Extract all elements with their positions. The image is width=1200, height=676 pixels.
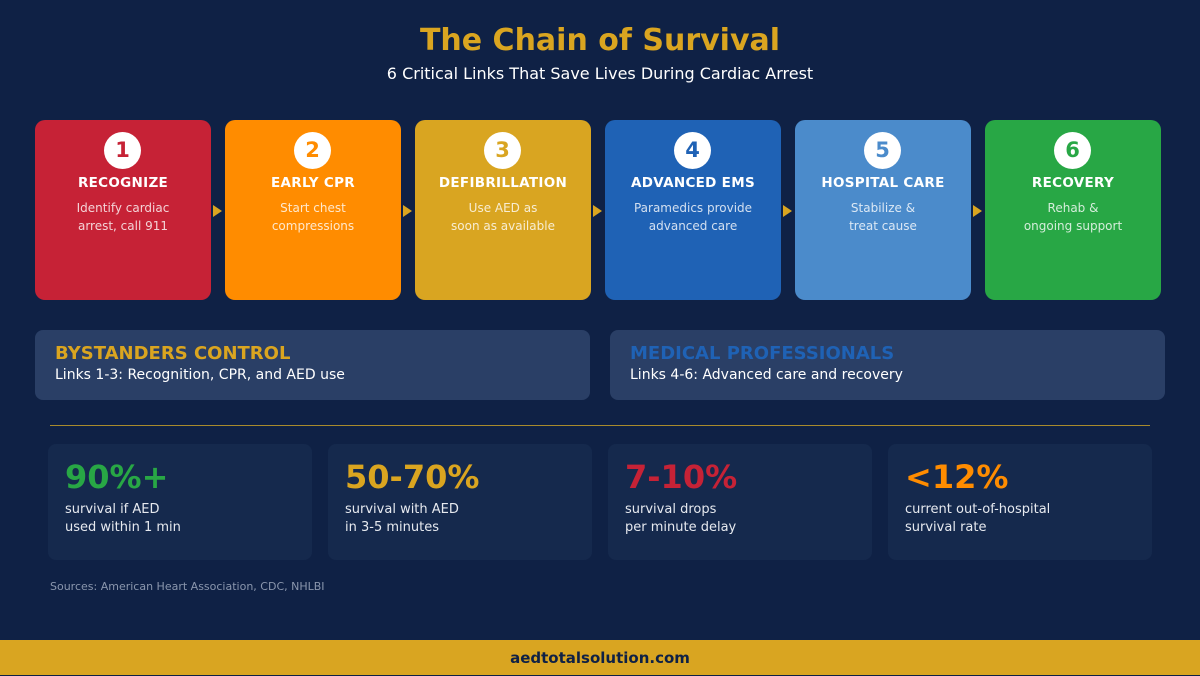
card 2: early cpr bbox=[225, 120, 401, 300]
arrow 4 bbox=[783, 205, 792, 217]
arrow 5 bbox=[973, 205, 982, 217]
stat 3: 7-10% bbox=[625, 458, 737, 496]
card 2: early cpr: EARLY CPR bbox=[271, 175, 355, 191]
stat 4 bbox=[888, 444, 1152, 560]
subtitle: 6 Critical Links That Save Lives During Cardiac Arrest bbox=[387, 64, 813, 83]
panel: medical professionals: Links 4-6: Advanced care and recovery bbox=[630, 367, 903, 383]
panel: medical professionals bbox=[610, 330, 1165, 400]
footer: aedtotalsolution.com bbox=[510, 649, 690, 667]
card 6: recovery: RECOVERY bbox=[1032, 175, 1114, 191]
arrow 1 bbox=[213, 205, 222, 217]
stat 4: survival rate bbox=[905, 520, 986, 535]
card 4: advanced ems: advanced care bbox=[649, 219, 737, 233]
card 4: advanced ems: 4 bbox=[685, 138, 700, 162]
sources: Sources: American Heart Association, CDC, NHLBI bbox=[50, 580, 325, 593]
card 6: recovery: 6 bbox=[1065, 138, 1080, 162]
stat 2 bbox=[328, 444, 592, 560]
card 2: early cpr: Start chest bbox=[280, 201, 346, 215]
stat 4: <12% bbox=[905, 458, 1008, 496]
stat 3: survival drops bbox=[625, 502, 716, 517]
stat 2: 50-70% bbox=[345, 458, 479, 496]
card 3: defibrillation: DEFIBRILLATION bbox=[439, 175, 567, 191]
panel: medical professionals: MEDICAL PROFESSIONALS bbox=[630, 343, 894, 364]
stat 3: per minute delay bbox=[625, 520, 736, 535]
card 6: recovery bbox=[985, 120, 1161, 300]
panel: bystanders: BYSTANDERS CONTROL bbox=[55, 343, 290, 364]
stat 2: in 3-5 minutes bbox=[345, 520, 439, 535]
card 5: hospital care: 5 bbox=[875, 138, 890, 162]
card 5: hospital care: HOSPITAL CARE bbox=[821, 175, 945, 191]
stat 1 bbox=[48, 444, 312, 560]
card 4: advanced ems: ADVANCED EMS bbox=[631, 175, 755, 191]
stat 4: current out-of-hospital bbox=[905, 502, 1050, 517]
card 3: defibrillation: soon as available bbox=[451, 219, 555, 233]
arrow 2 bbox=[403, 205, 412, 217]
stat 1: used within 1 min bbox=[65, 520, 181, 535]
card 3: defibrillation: Use AED as bbox=[469, 201, 537, 215]
card 4: advanced ems: Paramedics provide bbox=[634, 201, 752, 215]
card 5: hospital care: treat cause bbox=[849, 219, 917, 233]
card 1: recognize bbox=[35, 120, 211, 300]
panel: bystanders: Links 1-3: Recognition, CPR, and AED use bbox=[55, 367, 345, 383]
stat 1: survival if AED bbox=[65, 502, 160, 517]
arrow 3 bbox=[593, 205, 602, 217]
stat 1: 90%+ bbox=[65, 458, 168, 496]
footer bbox=[0, 640, 1200, 675]
card 6: recovery: Rehab & bbox=[1048, 201, 1098, 215]
card 5: hospital care bbox=[795, 120, 971, 300]
card 4: advanced ems bbox=[605, 120, 781, 300]
card 3: defibrillation bbox=[415, 120, 591, 300]
panel: bystanders bbox=[35, 330, 590, 400]
card 1: recognize: Identify cardiac bbox=[77, 201, 169, 215]
card 1: recognize: arrest, call 911 bbox=[78, 219, 168, 233]
card 6: recovery: ongoing support bbox=[1024, 219, 1122, 233]
card 1: recognize: 1 bbox=[115, 138, 130, 162]
card 5: hospital care: Stabilize & bbox=[851, 201, 915, 215]
card 2: early cpr: compressions bbox=[272, 219, 354, 233]
card 2: early cpr: 2 bbox=[305, 138, 320, 162]
card 1: recognize: RECOGNIZE bbox=[78, 175, 168, 191]
title: The Chain of Survival bbox=[420, 23, 780, 58]
stat 2: survival with AED bbox=[345, 502, 459, 517]
card 3: defibrillation: 3 bbox=[495, 138, 510, 162]
stat 3 bbox=[608, 444, 872, 560]
